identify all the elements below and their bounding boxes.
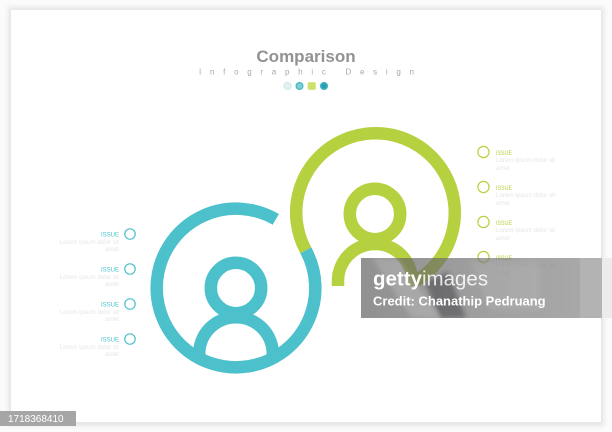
right issue list <box>478 146 555 277</box>
green person head <box>350 189 400 239</box>
right issue 2 <box>478 181 555 207</box>
right issue 4 <box>478 251 555 277</box>
right issue 1: ISSUE <box>496 150 513 157</box>
left issue 1: amet <box>105 246 119 253</box>
left issue 2: Lorem ipsum dolor sit <box>60 274 119 281</box>
right issue 3: ISSUE <box>496 220 513 227</box>
teal person ring <box>157 209 315 367</box>
left issue 2: ISSUE <box>101 266 120 274</box>
left issue 4: Lorem ipsum dolor sit <box>60 344 119 351</box>
right issue 2: amet <box>496 200 510 207</box>
right issue 3: amet <box>496 235 510 242</box>
teal person head <box>211 263 261 313</box>
title: Comparison <box>256 47 356 66</box>
right issue 2: Lorem ipsum dolor sit <box>496 192 555 199</box>
green outer arc <box>296 133 455 281</box>
image id tag <box>0 411 76 426</box>
pagination dots <box>284 82 327 90</box>
right issue 1 <box>478 146 555 172</box>
left issue 1: Lorem ipsum dolor sit <box>60 239 119 246</box>
green person body <box>338 244 412 286</box>
watermark credit: Credit: Chanathip Pedruang <box>373 294 546 308</box>
left issue 1 <box>60 229 135 253</box>
left issue 2: amet <box>105 281 119 288</box>
left issue 3 <box>60 299 135 323</box>
left issue 3: amet <box>105 316 119 323</box>
teal outer arc <box>157 209 315 367</box>
left issue 4: amet <box>105 351 119 358</box>
watermark logo: gettyimages <box>373 268 488 290</box>
green person ring <box>296 133 455 286</box>
left issue 3: ISSUE <box>101 302 120 308</box>
left issue 1: ISSUE <box>101 232 120 238</box>
left issue 4: ISSUE <box>101 336 120 344</box>
left issue 3: Lorem ipsum dolor sit <box>60 309 119 316</box>
right issue 4: amet <box>496 270 510 277</box>
right issue 2: ISSUE <box>496 185 513 192</box>
right issue 4: Lorem ipsum dolor sit <box>496 262 555 269</box>
right issue 4: ISSUE <box>496 255 513 262</box>
image id tag: 1718368410 <box>8 414 64 425</box>
teal person body <box>199 317 273 358</box>
left issue 2 <box>60 264 135 288</box>
left issue list <box>60 229 135 358</box>
right issue 1: amet <box>496 165 510 172</box>
subtitle: Infographic Design <box>199 68 414 76</box>
right issue 3 <box>478 216 555 242</box>
right issue 1: Lorem ipsum dolor sit <box>496 157 555 164</box>
right issue 3: Lorem ipsum dolor sit <box>496 227 555 234</box>
left issue 4 <box>60 334 135 358</box>
watermark band <box>361 258 612 318</box>
